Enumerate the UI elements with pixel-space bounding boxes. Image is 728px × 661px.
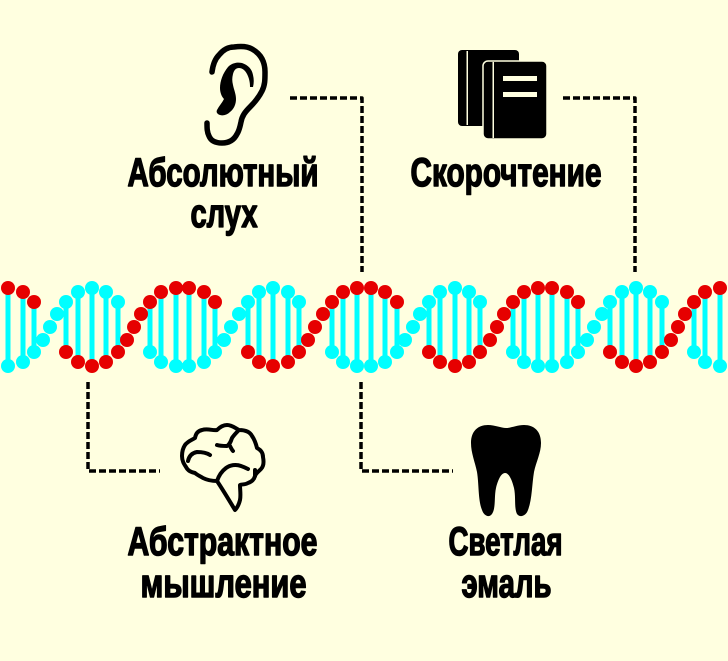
connector: ear to helix	[290, 98, 362, 272]
heading: speed reading: Скорочтение	[410, 151, 602, 195]
heading: light enamel: Светлая	[448, 520, 562, 564]
icon: books	[458, 50, 547, 139]
icon: brain	[182, 425, 264, 510]
icon: ear	[207, 46, 265, 143]
heading: abstract thinking: мышление	[140, 562, 306, 606]
dna helix	[1, 281, 727, 373]
connector: books to helix	[563, 98, 635, 272]
cyan strand	[1, 281, 727, 373]
heading: absolute pitch	[128, 151, 318, 236]
heading: abstract thinking: Абстрактное	[128, 520, 318, 564]
heading: absolute pitch: Абсолютный	[128, 151, 318, 195]
heading: light enamel	[448, 520, 562, 606]
connector: brain to helix	[88, 382, 160, 471]
heading: abstract thinking	[128, 520, 318, 606]
icon: tooth	[471, 425, 541, 516]
red strand	[1, 281, 727, 373]
dna rungs	[8, 288, 720, 366]
connector: tooth to helix	[361, 382, 453, 471]
heading: absolute pitch: слух	[190, 192, 258, 236]
heading: light enamel: эмаль	[462, 562, 552, 606]
